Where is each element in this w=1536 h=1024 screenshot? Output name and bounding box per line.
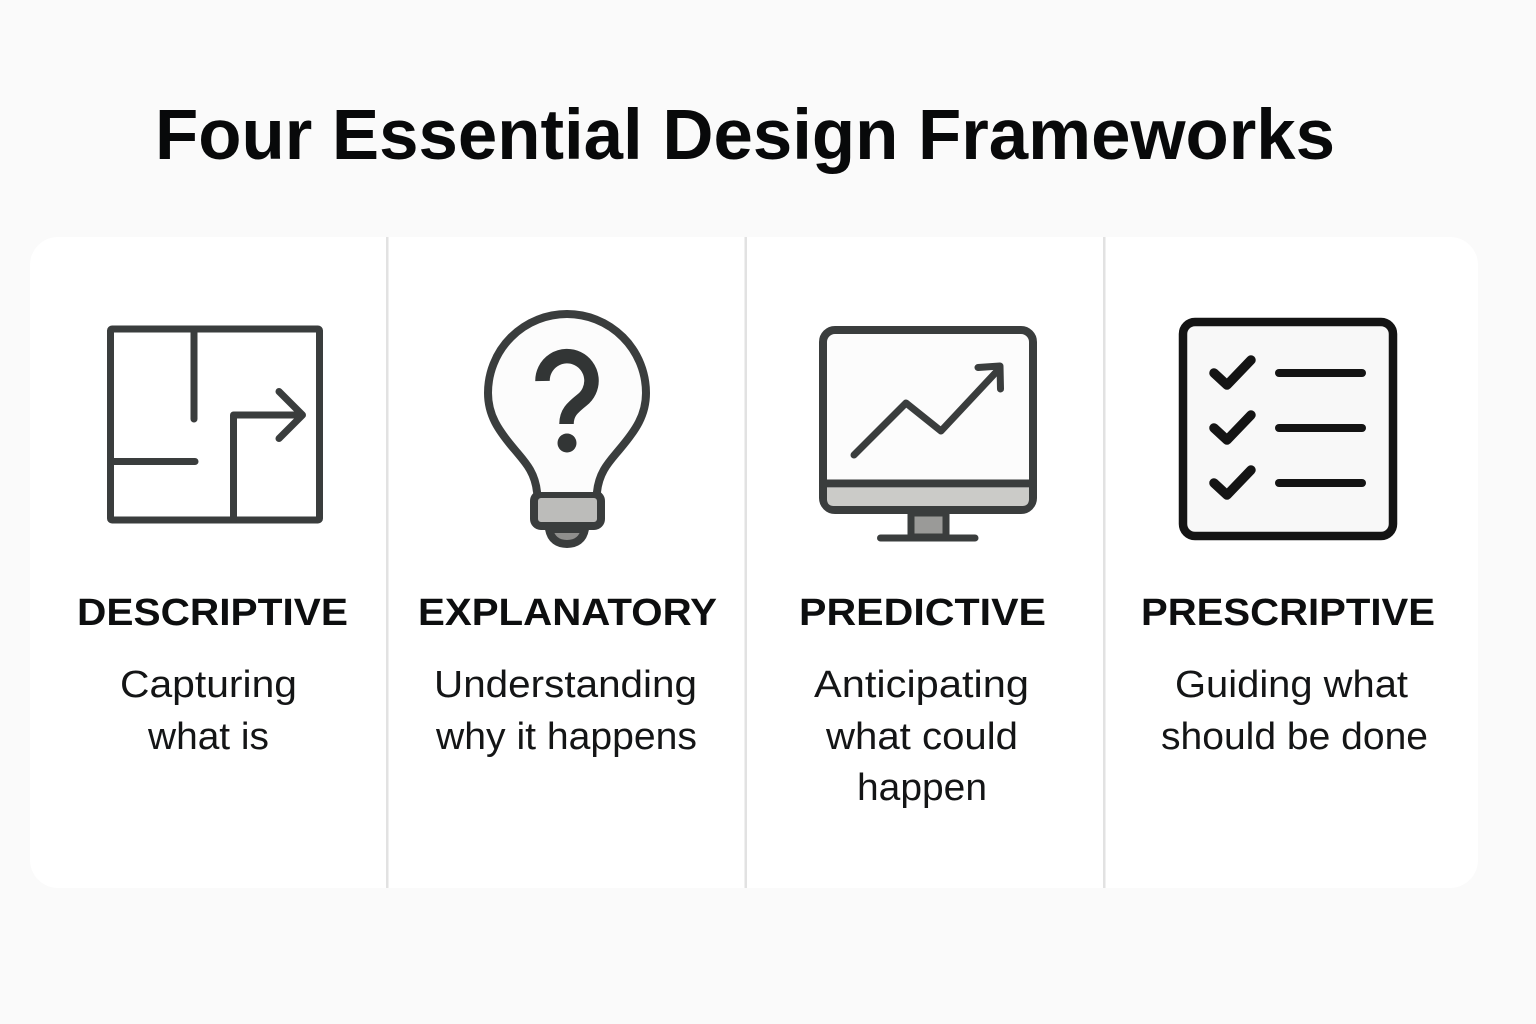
- text: predictive description: what could: [825, 716, 1018, 758]
- column: predictive: [799, 330, 1046, 809]
- icon: checklist: [1183, 322, 1393, 536]
- text: descriptive description: [120, 664, 297, 758]
- icon: floor plan with arrow: [110, 329, 320, 520]
- text: prescriptive description: [1161, 664, 1428, 758]
- text: predictive description: [814, 664, 1029, 809]
- icon: light bulb with question mark: [488, 314, 646, 544]
- heading: descriptive: DESCRIPTIVE: [77, 592, 348, 634]
- title: Four Essential Design Frameworks: [155, 96, 1335, 175]
- icon: monitor with rising chart: [823, 330, 1033, 538]
- heading: explanatory: EXPLANATORY: [418, 592, 717, 634]
- text: descriptive description: what is: [147, 716, 269, 758]
- text: explanatory description: why it happens: [435, 716, 697, 758]
- column: prescriptive: [1141, 322, 1435, 758]
- text: descriptive description: Capturing: [120, 664, 297, 706]
- text: explanatory description: Understanding: [434, 664, 697, 706]
- text: prescriptive description: should be done: [1161, 716, 1428, 758]
- text: prescriptive description: Guiding what: [1175, 664, 1408, 706]
- text: predictive description: happen: [857, 767, 987, 809]
- column: explanatory: [418, 314, 717, 758]
- column: descriptive: [77, 329, 348, 758]
- heading: prescriptive: PRESCRIPTIVE: [1141, 592, 1435, 634]
- heading: predictive: PREDICTIVE: [799, 592, 1046, 634]
- panel: four frameworks: [30, 237, 1478, 888]
- text: explanatory description: [434, 664, 697, 758]
- text: predictive description: Anticipating: [814, 664, 1029, 706]
